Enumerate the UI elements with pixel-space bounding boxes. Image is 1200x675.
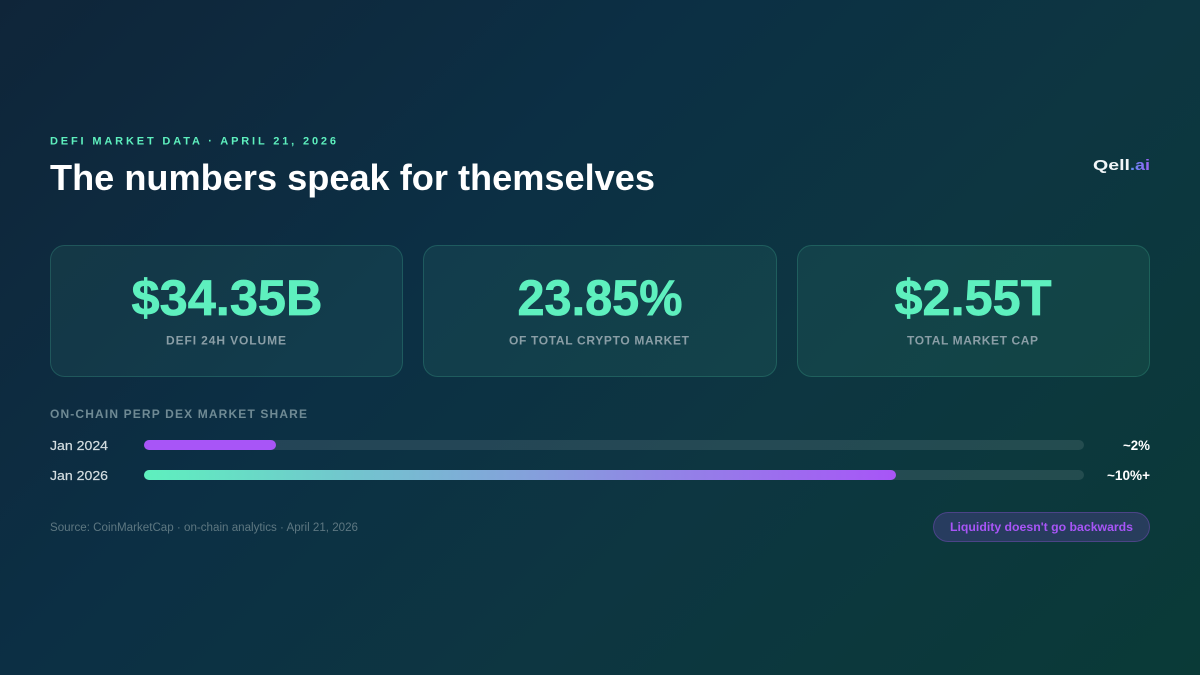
row: Jan 2024: ~2% [1123,437,1151,453]
panel: total market cap [798,246,1150,376]
logo: .ai [1130,157,1150,174]
panel: DeFi 24h volume [50,246,402,376]
section heading: ON-CHAIN PERP DEX MARKET SHARE [50,407,307,421]
logo: Qell [1093,157,1130,174]
row: Jan 2026: Jan 2026 [50,468,108,483]
stat label: TOTAL MARKET CAP [907,334,1038,348]
title: The numbers speak for themselves [50,157,655,198]
bar chart [50,437,1151,483]
row: Jan 2026: ~10%+ [1107,467,1150,483]
stat value: $2.55T [894,270,1052,326]
stat value: $34.35B [132,270,322,326]
eyebrow: DEFI MARKET DATA · APRIL 21, 2026 [50,136,336,148]
row: Jan 2026 [50,467,1150,483]
row: Jan 2024 [50,437,1151,453]
stat label: DEFI 24H VOLUME [166,334,286,348]
row: Jan 2024: Jan 2024 [50,438,108,453]
logo [1093,157,1150,174]
stat label: OF TOTAL CRYPTO MARKET [509,334,690,348]
callout pill [934,512,1150,542]
callout pill: Liquidity doesn't go backwards [950,522,1133,534]
source note: Source: CoinMarketCap · on-chain analytics · April 21, 2026 [50,522,358,534]
panel: share of total crypto market [424,246,776,376]
stat value: 23.85% [518,270,682,326]
